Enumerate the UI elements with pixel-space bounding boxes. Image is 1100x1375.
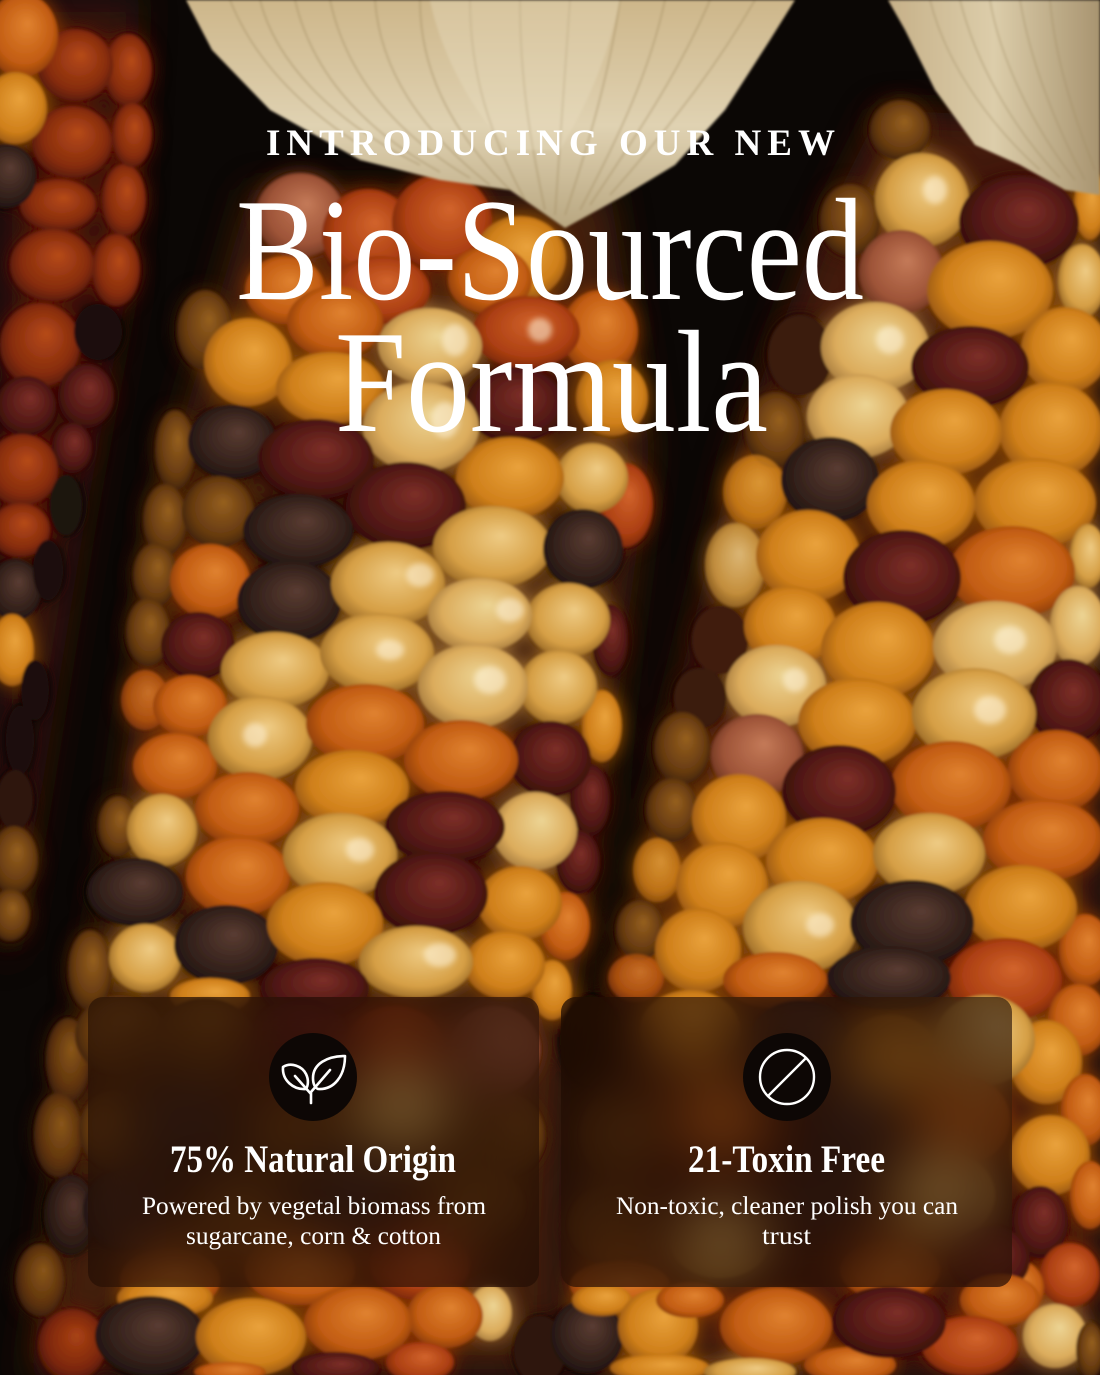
heading line one: Bio-Sourced bbox=[236, 169, 864, 331]
corn husk: centre bbox=[186, 0, 795, 228]
corn husk: right bbox=[888, 0, 1100, 195]
right cob kernels bbox=[608, 100, 1100, 1316]
kernels beneath the frosted panels bbox=[75, 990, 1035, 1312]
body text: trust bbox=[762, 1221, 811, 1250]
centre cob kernels bbox=[68, 173, 653, 1020]
body text: sugarcane, corn & cotton bbox=[186, 1221, 441, 1250]
kernel highlights bbox=[243, 176, 1026, 967]
heading: 75% Natural Origin: 75% Natural Origin bbox=[170, 1138, 456, 1181]
title group bbox=[236, 123, 864, 463]
panel: 75% natural origin bbox=[88, 997, 539, 1287]
icon: prohibited circle bbox=[743, 1033, 831, 1121]
body text bbox=[616, 1191, 958, 1250]
body text: Powered by vegetal biomass from bbox=[142, 1191, 486, 1220]
far-left cob bbox=[0, 0, 152, 941]
eyebrow: introducing our new: INTRODUCING OUR NEW bbox=[266, 123, 835, 164]
heading: 21-Toxin Free: 21-Toxin Free bbox=[688, 1138, 885, 1181]
body text: Non-toxic, cleaner polish you can bbox=[616, 1191, 958, 1220]
icon: leaf sprout bbox=[269, 1033, 357, 1121]
body text bbox=[142, 1191, 486, 1250]
kernels below the panels bbox=[95, 1274, 1100, 1375]
lower-left dim kernels bbox=[16, 1018, 106, 1375]
heading line two: Formula bbox=[335, 301, 768, 463]
panel: 21-toxin free bbox=[561, 997, 1012, 1287]
